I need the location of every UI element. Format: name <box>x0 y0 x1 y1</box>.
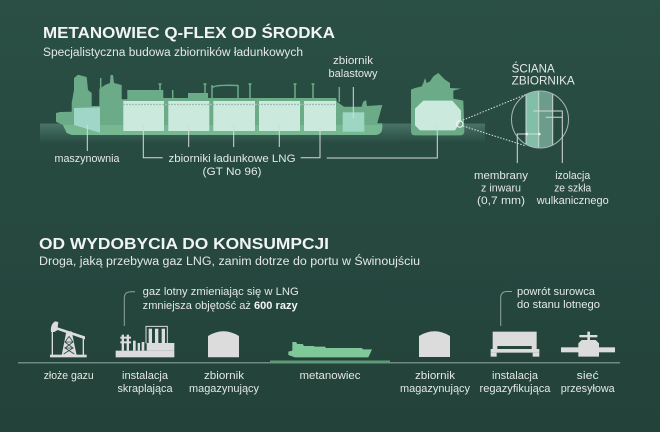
subtitle: supply chain: Droga, jaką przebywa gaz LNG, zanim dotrze do portu w Świnoujściu <box>39 255 420 268</box>
icon: storage tank 2 <box>419 331 450 357</box>
label: membranes <box>474 170 529 207</box>
label: cargo tanks: (GT No 96) <box>202 166 262 178</box>
lens: tank wall detail <box>512 90 568 150</box>
label: insulation: ze szkła <box>554 183 592 195</box>
callout: regasification: do stanu lotnego <box>517 299 600 311</box>
callout: liquefaction: zmniejsza objętość aż 600 razy <box>143 300 299 312</box>
dotted zoom lines <box>463 94 527 146</box>
label: storage 2: zbiornik <box>415 370 456 382</box>
cross-section water <box>400 124 485 142</box>
cross-section hull <box>411 73 464 135</box>
label: tank wall: ZBIORNIKA <box>512 76 575 88</box>
label: storage <box>189 370 259 395</box>
marker circle on hull <box>457 121 463 127</box>
ship side view <box>56 75 382 135</box>
label: liquefaction: instalacja <box>122 370 169 382</box>
label: ballast tank: zbiornik <box>333 55 374 67</box>
label: membranes: membrany <box>474 170 529 182</box>
callout: liquefaction: gaz lotny zmieniając się w LNG <box>143 286 299 298</box>
label: carrier: metanowiec <box>300 370 361 382</box>
hull and superstructure <box>56 75 382 135</box>
label: cargo tanks <box>168 153 296 178</box>
subtitle: ship section: Specjalistyczna budowa zbiorników ładunkowych <box>43 47 303 59</box>
label: storage 2: magazynujący <box>400 383 470 395</box>
engine room <box>74 107 100 133</box>
label: membranes: z inwaru <box>481 183 521 195</box>
label: tank wall: ŚCIANA <box>512 63 555 76</box>
label: regasification: instalacja <box>492 370 539 382</box>
ballast tank <box>343 112 364 132</box>
title: supply chain: OD WYDOBYCIA DO KONSUMPCJI <box>39 236 329 253</box>
cross-section tank <box>415 101 461 130</box>
label: storage: zbiornik <box>204 370 245 382</box>
callout: regasification: powrót surowca <box>517 286 596 298</box>
label: storage 2 <box>400 370 470 395</box>
leader lines: ship <box>87 87 437 158</box>
ship cross-section <box>400 73 485 142</box>
lower hull <box>63 125 382 135</box>
icon: storage tank <box>208 331 239 357</box>
callout: regasification <box>501 286 600 326</box>
deck masts and pipes <box>101 78 339 102</box>
label: storage: magazynujący <box>189 383 259 395</box>
label: engine room: maszynownia <box>54 153 120 165</box>
label: tank wall <box>512 63 575 88</box>
label: regasification: regazyfikująca <box>480 383 551 395</box>
icon: regasification plant <box>491 332 539 357</box>
icon: pipeline valve <box>561 332 615 357</box>
label: membranes: (0,7 mm) <box>477 195 525 207</box>
cargo tanks LNG <box>123 101 336 131</box>
label: ballast tank: balastowy <box>328 68 378 80</box>
leader lines: wall <box>517 111 562 163</box>
label: regasification <box>480 370 551 395</box>
label: pipeline: przesyłowa <box>561 383 616 395</box>
label: liquefaction: skraplająca <box>118 383 173 395</box>
title: ship section: METANOWIEC Q-FLEX OD ŚRODKA <box>43 23 335 42</box>
baseline green section <box>270 360 390 363</box>
label: insulation <box>536 170 609 207</box>
icon: gas field pump <box>50 321 87 357</box>
label: ballast tank <box>328 55 378 80</box>
label: gas field: złoże gazu <box>44 370 94 382</box>
label: insulation: wulkanicznego <box>536 195 609 207</box>
callout: liquefaction <box>124 286 299 326</box>
label: insulation: izolacja <box>555 170 591 182</box>
label: liquefaction <box>118 370 173 395</box>
icon: liquefaction plant <box>116 326 174 357</box>
baseline <box>18 362 620 364</box>
labels: supply chain <box>44 370 616 395</box>
icon: small ship <box>288 342 372 357</box>
label: pipeline <box>561 370 616 395</box>
water band behind ship <box>40 124 400 144</box>
label: pipeline: sieć <box>577 370 599 382</box>
label: cargo tanks: zbiorniki ładunkowe LNG <box>168 153 296 165</box>
